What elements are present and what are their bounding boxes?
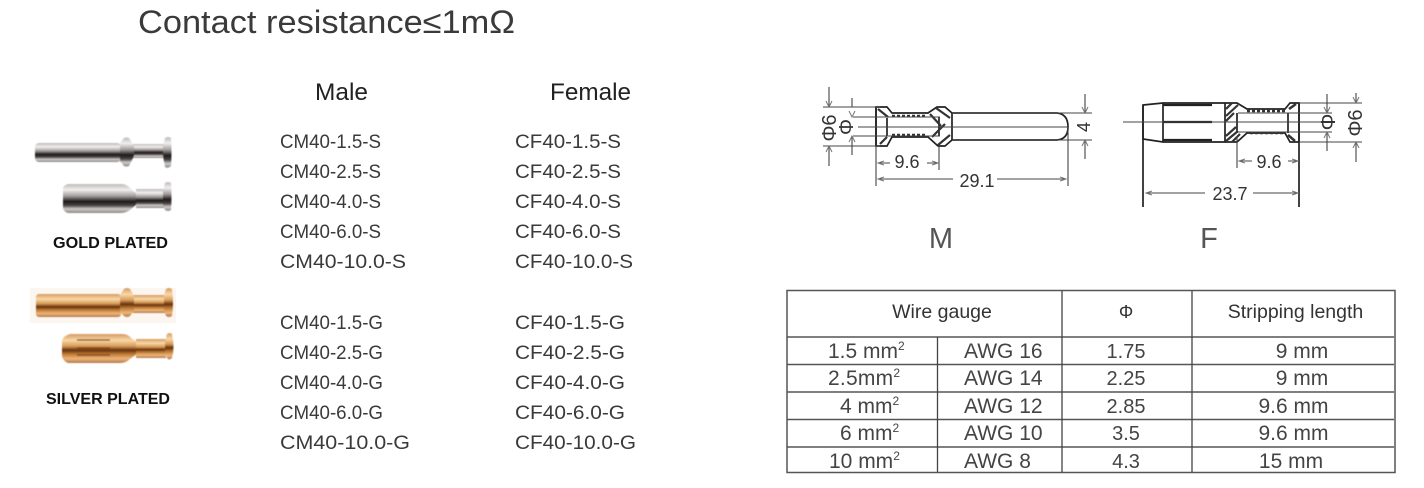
dimension: Φ6: Φ6 bbox=[1345, 109, 1367, 137]
dimension: 9.6: 9.6 bbox=[894, 152, 920, 172]
diagram: male contact bbox=[819, 87, 1094, 191]
list: male silver part numbers bbox=[280, 131, 406, 273]
list: male silver part numbers: CM40-10.0-S bbox=[280, 251, 406, 273]
row: 4 mm2: 4 mm bbox=[840, 395, 892, 418]
photo: silver-coloured male and female contacts bbox=[35, 137, 172, 213]
list: male silver part numbers: CM40-2.5-S bbox=[280, 161, 381, 183]
diagram: female contact bbox=[1123, 93, 1367, 207]
row: 1.5 mm2: 2 bbox=[898, 339, 905, 353]
row: 4 mm2: 2.85 bbox=[1107, 396, 1145, 418]
dimension: Φ: Φ bbox=[836, 119, 858, 135]
row: 6 mm2: 9.6 mm bbox=[1258, 422, 1329, 445]
table header bbox=[892, 301, 1363, 323]
list: female silver part numbers bbox=[515, 131, 633, 273]
dimension: Φ6: Φ6 bbox=[819, 114, 841, 142]
row: 2.5 mm2 bbox=[828, 366, 1328, 390]
list: male gold part numbers: CM40-1.5-G bbox=[280, 312, 383, 334]
list: male gold part numbers: CM40-2.5-G bbox=[280, 342, 383, 364]
row: 6 mm2: 6 mm bbox=[840, 422, 892, 445]
photo: gold-coloured male and female contacts bbox=[30, 288, 176, 363]
row: 6 mm2: AWG 10 bbox=[964, 422, 1043, 445]
row: 2.5 mm2: 2.25 bbox=[1107, 368, 1145, 390]
row: 10 mm2: 10 mm bbox=[829, 450, 893, 473]
table header: Φ bbox=[1119, 302, 1133, 322]
dimension: 23.7: 23.7 bbox=[1212, 184, 1248, 204]
table header: Stripping length bbox=[1228, 301, 1363, 323]
column heading: Female: Female bbox=[550, 79, 631, 106]
list: female silver part numbers: CF40-4.0-S bbox=[515, 191, 621, 213]
list: female gold part numbers: CF40-1.5-G bbox=[515, 312, 625, 334]
row: 4 mm2: AWG 12 bbox=[964, 395, 1043, 418]
list: male gold part numbers bbox=[280, 312, 410, 454]
list: female gold part numbers: CF40-2.5-G bbox=[515, 342, 625, 364]
row: 2.5 mm2: 9 mm bbox=[1276, 367, 1328, 390]
row: 10 mm2: AWG 8 bbox=[964, 450, 1031, 473]
row: 4 mm2: 9.6 mm bbox=[1258, 395, 1329, 418]
row: 1.5 mm2: 1.5 mm bbox=[828, 340, 898, 363]
list: male silver part numbers: CM40-1.5-S bbox=[280, 131, 381, 153]
list: male gold part numbers: CM40-6.0-G bbox=[280, 402, 383, 424]
row: 4 mm2: 2 bbox=[892, 394, 900, 408]
row: 2.5 mm2: 2 bbox=[893, 366, 900, 380]
list: female silver part numbers: CF40-2.5-S bbox=[515, 161, 621, 183]
list: female silver part numbers: CF40-1.5-S bbox=[515, 131, 621, 153]
row: 1.5 mm2 bbox=[828, 339, 1328, 363]
list: female silver part numbers: CF40-10.0-S bbox=[515, 251, 633, 273]
row: 1.5 mm2: AWG 16 bbox=[964, 340, 1043, 363]
row: 6 mm2: 2 bbox=[892, 421, 900, 435]
label: F: F bbox=[1200, 223, 1218, 255]
list: female gold part numbers: CF40-6.0-G bbox=[515, 402, 625, 424]
row: 10 mm2: 15 mm bbox=[1259, 450, 1323, 473]
list: female silver part numbers: CF40-6.0-S bbox=[515, 221, 621, 243]
table header: Wire gauge bbox=[892, 301, 992, 323]
list: male gold part numbers: CM40-4.0-G bbox=[280, 372, 383, 394]
table: wire gauge specifications bbox=[787, 290, 1395, 473]
row: 1.5 mm2: 9 mm bbox=[1276, 340, 1328, 363]
list: female gold part numbers: CF40-4.0-G bbox=[515, 372, 625, 394]
list: male silver part numbers: CM40-4.0-S bbox=[280, 191, 381, 213]
label: silver plated: SILVER PLATED bbox=[46, 391, 170, 408]
row: 10 mm2: 4.3 bbox=[1112, 451, 1140, 473]
dimension: 29.1: 29.1 bbox=[959, 171, 995, 191]
row: 10 mm2: 2 bbox=[893, 449, 900, 463]
column heading: Male: Male bbox=[315, 79, 368, 106]
row: 2.5 mm2: 2.5mm bbox=[828, 367, 893, 390]
label: gold plated: GOLD PLATED bbox=[53, 235, 168, 252]
list: female gold part numbers bbox=[515, 312, 636, 454]
row: 10 mm2 bbox=[829, 449, 1323, 473]
dimension: Φ: Φ bbox=[1317, 114, 1340, 130]
row: 2.5 mm2: AWG 14 bbox=[964, 367, 1043, 390]
list: female gold part numbers: CF40-10.0-G bbox=[515, 432, 636, 454]
list: male silver part numbers: CM40-6.0-S bbox=[280, 221, 381, 243]
label: M: M bbox=[929, 223, 953, 255]
row: 6 mm2 bbox=[840, 421, 1329, 445]
dimension: 9.6: 9.6 bbox=[1256, 152, 1282, 172]
row: 1.5 mm2: 1.75 bbox=[1107, 341, 1145, 363]
row: 4 mm2 bbox=[840, 394, 1329, 418]
dimension: 4: 4 bbox=[1074, 122, 1094, 132]
title: Contact resistance≤1mΩ bbox=[138, 4, 515, 40]
list: male gold part numbers: CM40-10.0-G bbox=[280, 432, 410, 454]
row: 6 mm2: 3.5 bbox=[1112, 423, 1140, 445]
